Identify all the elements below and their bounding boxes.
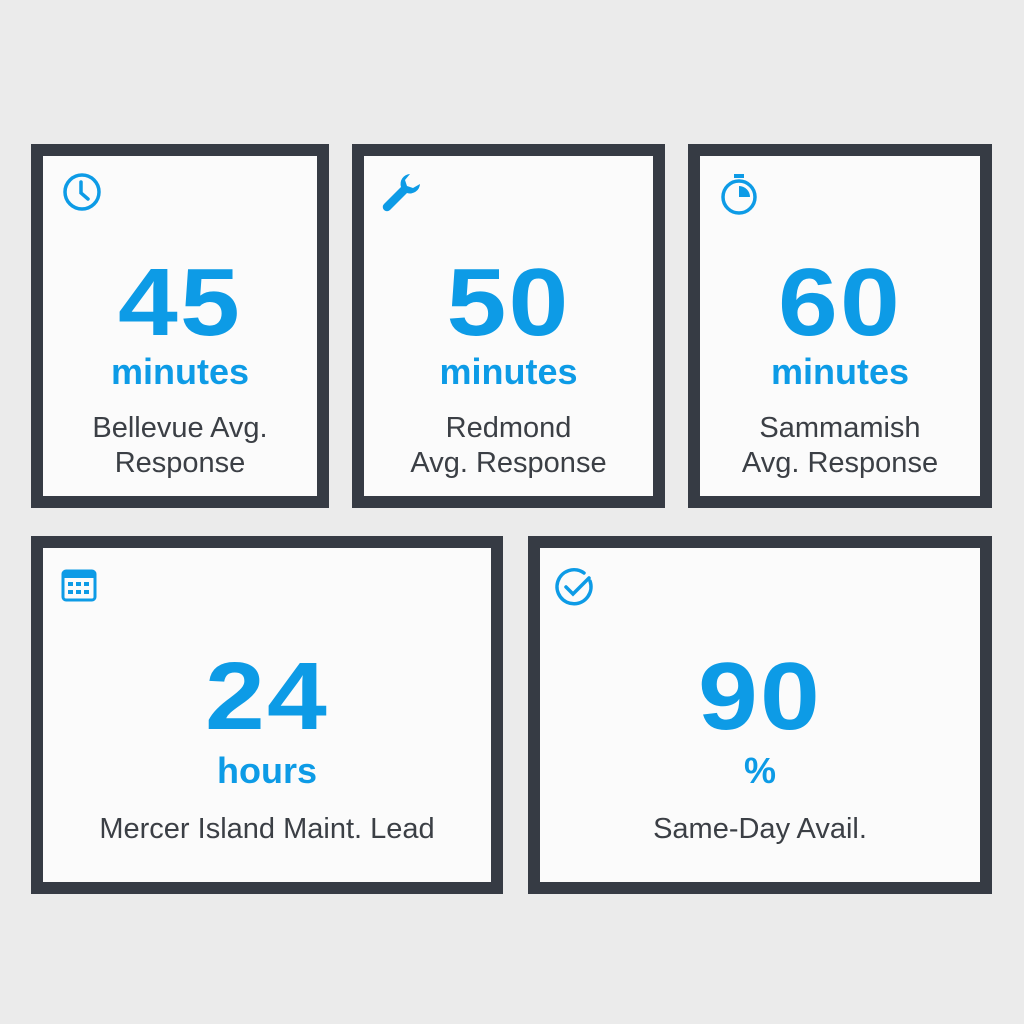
card: Redmond — [352, 144, 665, 508]
unit: minutes — [771, 351, 909, 392]
icon: clock — [63, 173, 101, 211]
label: Mercer Island Maint. Lead — [99, 813, 435, 845]
number: 50 — [446, 249, 571, 356]
card: Sammamish — [688, 144, 992, 508]
label: Bellevue Avg. — [92, 412, 268, 444]
card: Bellevue — [31, 144, 329, 508]
icon: check circle — [555, 568, 593, 606]
icon: stopwatch — [721, 174, 757, 215]
unit: minutes — [111, 351, 249, 392]
label: Avg. Response — [742, 447, 938, 479]
number: 24 — [205, 643, 329, 750]
label: Avg. Response — [410, 447, 607, 479]
label — [410, 412, 607, 479]
label — [92, 412, 268, 479]
unit: hours — [217, 750, 317, 791]
unit: % — [744, 750, 776, 791]
card: Mercer Island — [31, 536, 503, 894]
card: Same-Day — [528, 536, 992, 894]
icon: calendar — [62, 570, 96, 602]
label: Redmond — [446, 412, 571, 444]
label: Response — [115, 447, 245, 479]
label: Sammamish — [759, 412, 921, 444]
icon: wrench — [382, 174, 420, 212]
label — [742, 412, 938, 479]
label: Same-Day Avail. — [653, 813, 867, 845]
unit: minutes — [439, 351, 578, 392]
number: 90 — [698, 643, 822, 750]
number: 60 — [778, 249, 902, 356]
number: 45 — [118, 249, 242, 356]
